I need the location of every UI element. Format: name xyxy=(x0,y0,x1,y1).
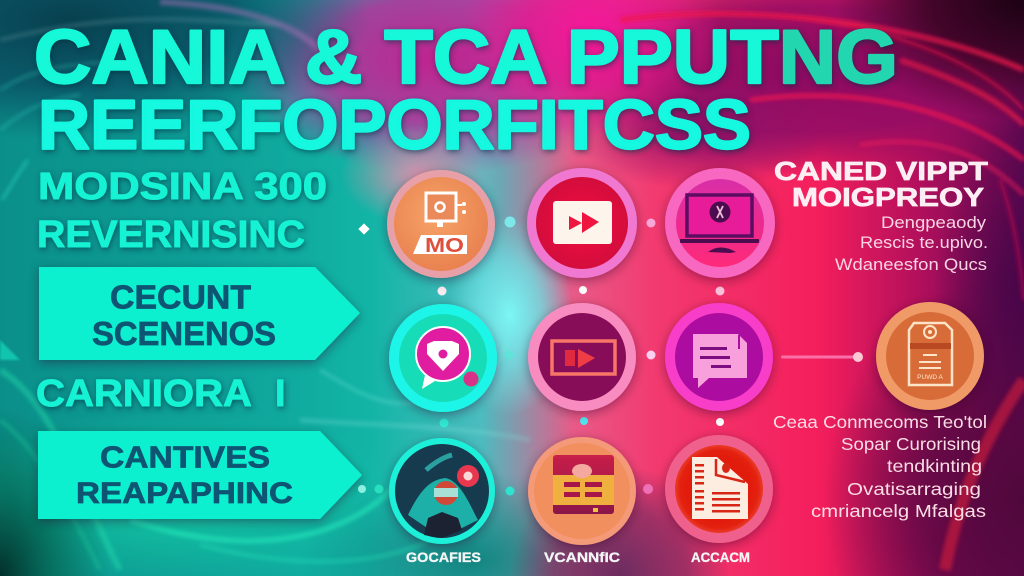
icon: purple chat document xyxy=(665,303,773,411)
arrow panel: cecunt scenenos: CECUNT xyxy=(110,278,251,316)
icon: magenta laptop xyxy=(665,168,775,278)
icon: orange id card: PUWD A xyxy=(917,374,943,381)
arrow panel: cecunt scenenos xyxy=(39,267,360,360)
left heading: modsina: REVERNISINC xyxy=(37,214,305,256)
title xyxy=(34,15,898,164)
arrow panel: cecunt scenenos: SCENENOS xyxy=(92,315,276,352)
icon: orange menu card xyxy=(528,437,636,545)
right text block lower: Ceaa Conmecoms Teo'tol xyxy=(773,412,987,432)
icon labels xyxy=(406,550,750,565)
icon: red video play xyxy=(527,168,637,278)
right text block lower: Sopar Curorising xyxy=(841,434,981,454)
icon labels: GOCAFIES xyxy=(406,550,481,565)
right text block lower: cmriancelg Mfalgas xyxy=(811,501,986,521)
icon: red document xyxy=(665,435,773,543)
arrow panel: cantives reapaphinc xyxy=(38,431,362,519)
subheading: carniora: CARNIORA xyxy=(36,373,252,415)
arrow panel: cantives reapaphinc: CANTIVES xyxy=(100,440,270,474)
arrow panel: cantives reapaphinc: REAPAPHINC xyxy=(76,477,293,510)
right text block lower xyxy=(773,412,987,521)
right text block upper: Dengpeaody xyxy=(881,213,987,232)
right text block upper: Rescis te.upivo. xyxy=(860,233,988,252)
icon: orange id card xyxy=(876,302,984,410)
right heading: MOIGPREOY xyxy=(792,182,984,212)
right text block upper xyxy=(835,213,988,274)
title: REERFOPORFITCSS xyxy=(38,86,751,164)
icon: maroon video frame xyxy=(528,303,636,411)
icon: orange camera: MO xyxy=(425,235,464,257)
icon labels: VCANNfIC xyxy=(544,550,620,565)
subheading: carniora: I xyxy=(275,373,286,415)
left heading: modsina: MODSINA 300 xyxy=(38,166,327,208)
icon: orange camera xyxy=(387,170,495,278)
title: CANIA & TCA PPUT NG xyxy=(34,15,898,100)
connector dots xyxy=(358,216,863,496)
icon: teal heart chat xyxy=(389,304,497,412)
icon: portrait with teal ring xyxy=(392,441,492,541)
icon labels: ACCACM xyxy=(691,550,750,565)
right text block upper: Wdaneesfon Qucs xyxy=(835,255,987,274)
right heading xyxy=(774,156,988,212)
right text block lower: Ovatisarraging xyxy=(847,479,981,499)
left heading: modsina xyxy=(37,166,327,256)
right heading: CANED VIPPT xyxy=(774,156,988,186)
right text block lower: tendkinting xyxy=(887,456,982,476)
